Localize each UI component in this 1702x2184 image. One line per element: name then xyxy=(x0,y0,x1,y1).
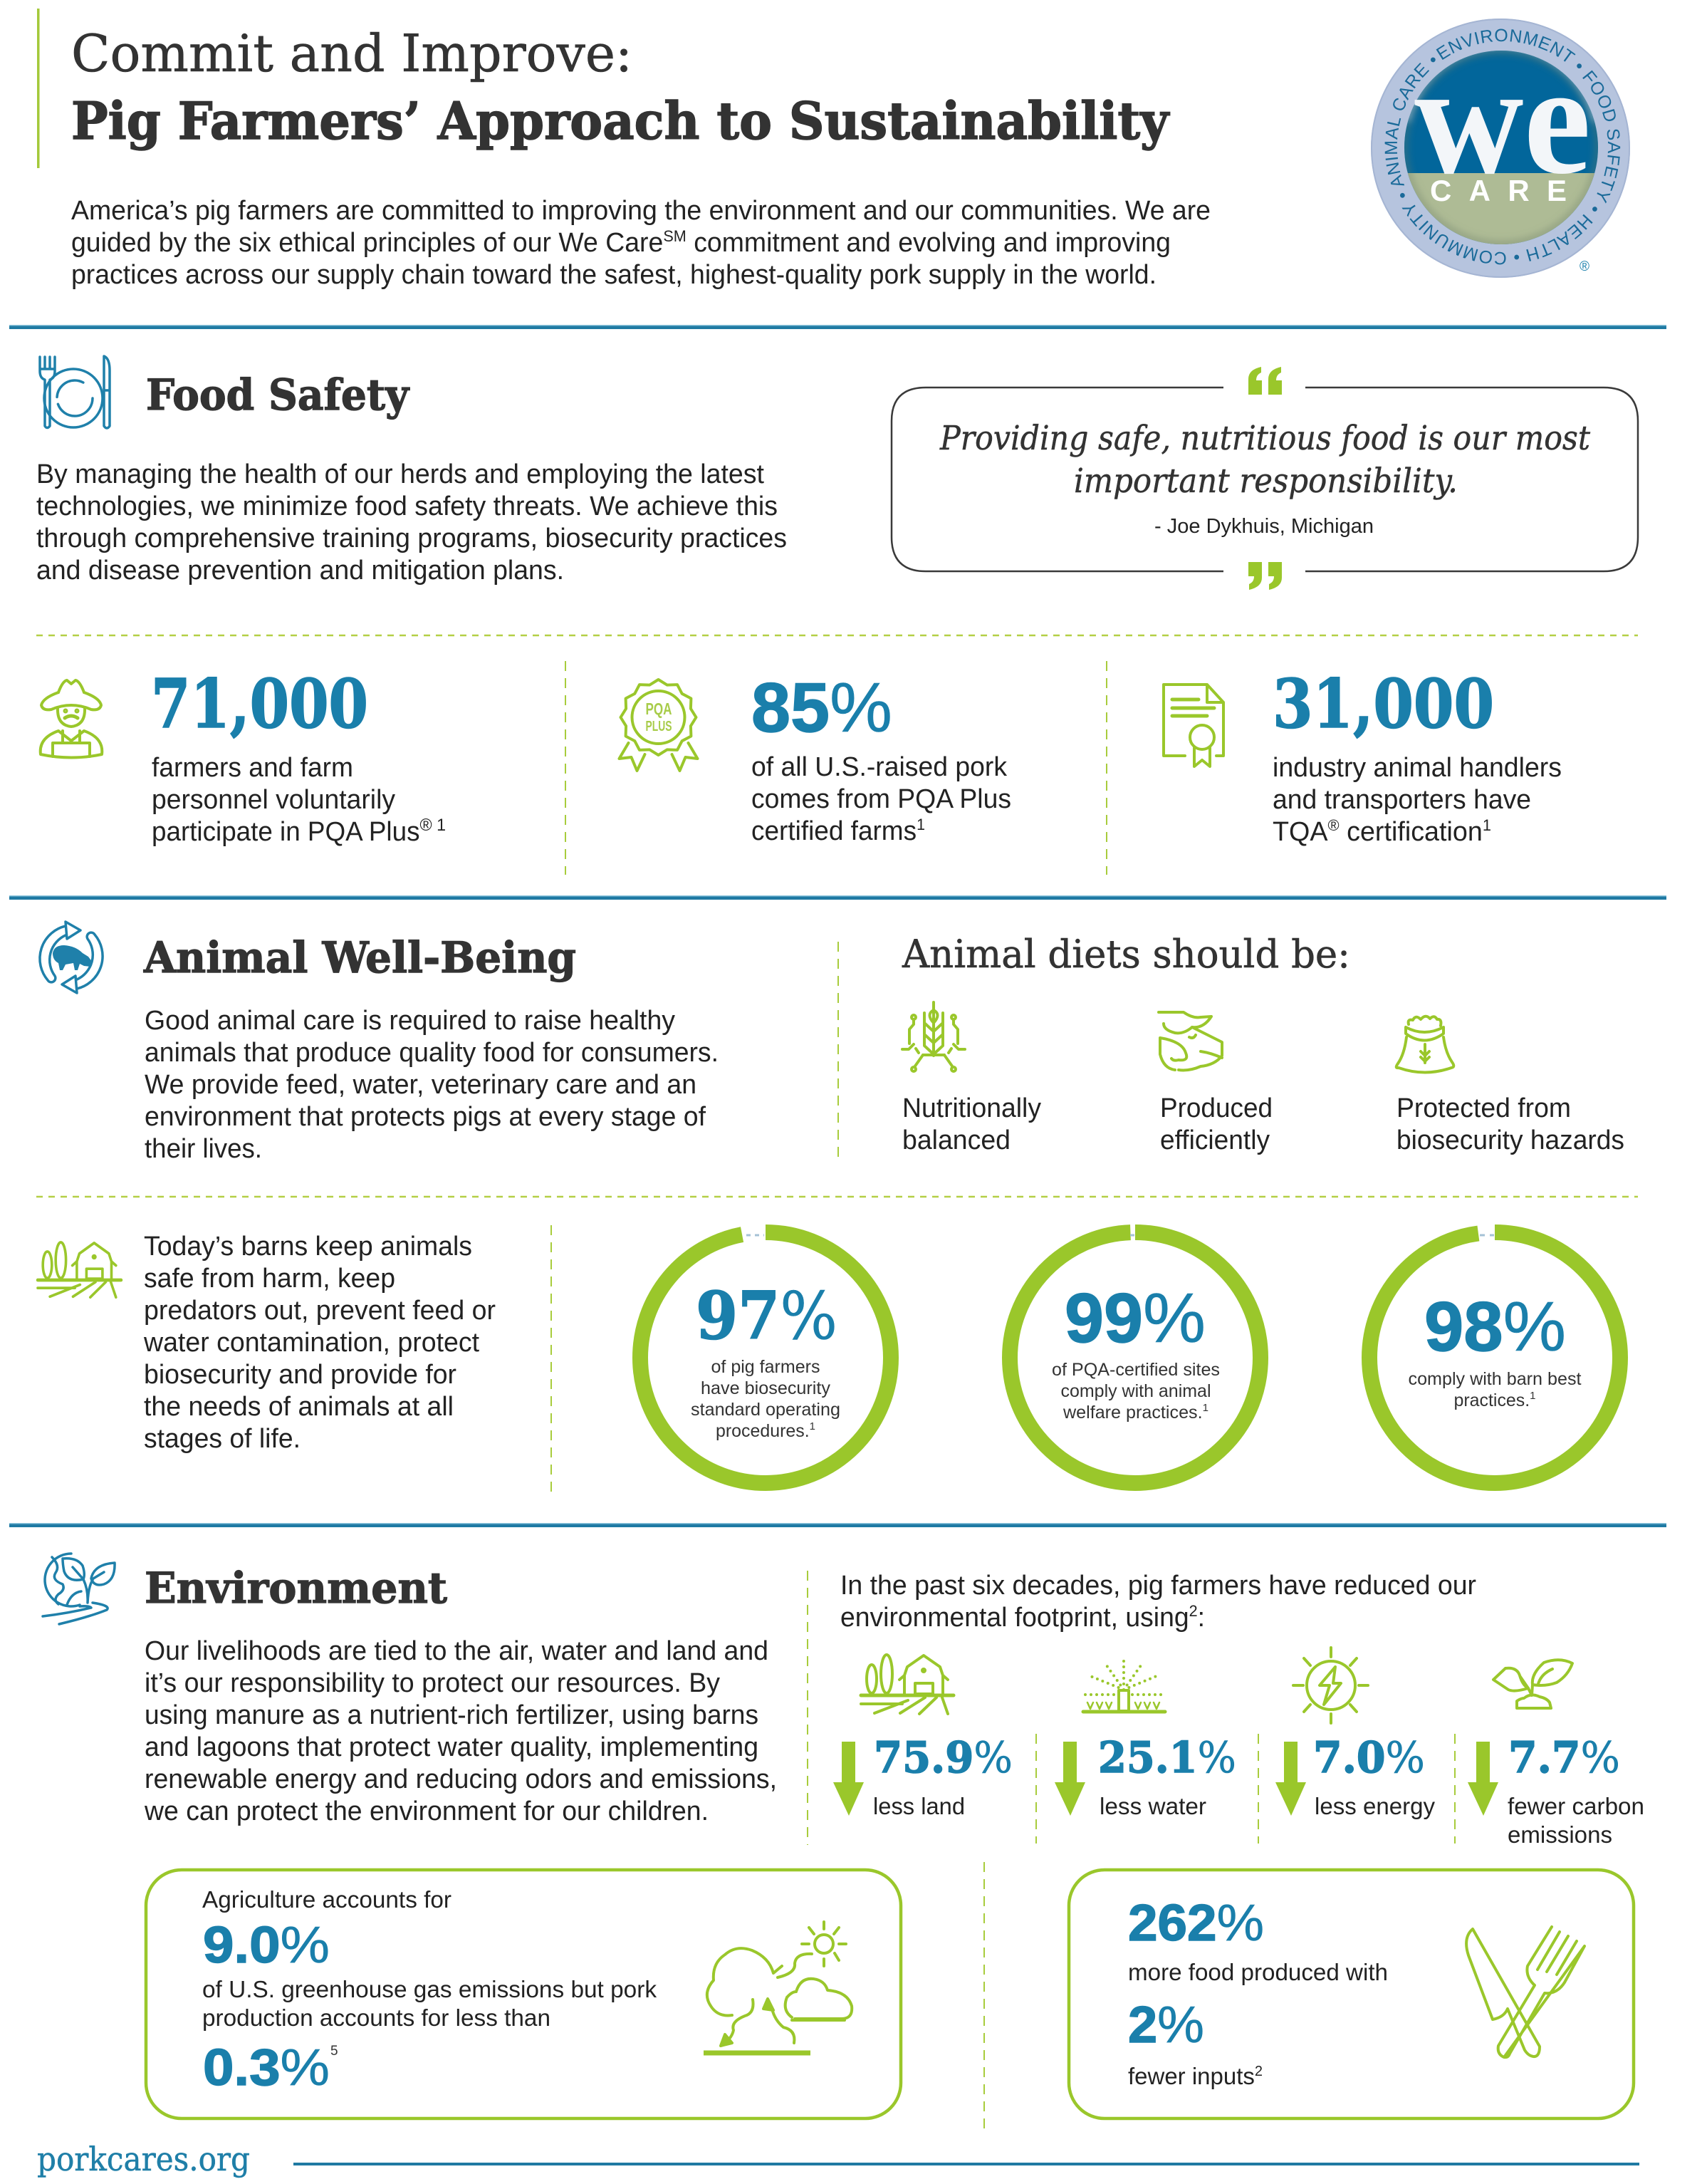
body text xyxy=(144,1636,777,1826)
icon: opening quote mark xyxy=(1248,367,1282,395)
stat: 31,000 handlers: industry animal handlers xyxy=(1273,753,1562,783)
chart: 97% donut: 1 xyxy=(810,1420,815,1432)
diet item: nutritionally balanced: balanced xyxy=(902,1125,1011,1155)
chart: 98% donut: practices. xyxy=(1454,1390,1530,1410)
body text: By managing the health of our herds and employing the latest xyxy=(36,459,764,489)
panel: food safety xyxy=(36,356,1638,875)
chart: 97% donut: have biosecurity xyxy=(701,1378,830,1398)
callout: quote xyxy=(892,367,1638,590)
heading: Animal Well-Being xyxy=(143,933,576,983)
stat: less energy xyxy=(1275,1648,1435,1819)
stat: 71,000 farmers: ® xyxy=(419,816,432,835)
logo: We Care seal: ENVIRONMENT • FOOD SAFETY • HEALTH • COMMUNITY • ANIMAL CARE • xyxy=(1384,28,1621,265)
stat: less water: 25.1% xyxy=(1098,1733,1236,1783)
stat: 71,000 farmers: 71,000 xyxy=(151,665,368,744)
body text: Our livelihoods are tied to the air, water and land and xyxy=(145,1636,768,1666)
chart: 99% donut: of PQA-certified sites xyxy=(1052,1360,1220,1380)
stat: 71,000 farmers xyxy=(41,665,446,847)
callout: quote: important responsibility. xyxy=(1074,462,1458,501)
body text: it’s our responsibility to protect our resources. By xyxy=(145,1668,720,1698)
stat: 85% of pork: of all U.S.-raised pork xyxy=(751,752,1008,782)
diet item: produced efficiently xyxy=(1159,1012,1273,1155)
chart: 99% donut: 1 xyxy=(1203,1402,1208,1414)
stat: fewer carbon emissions: fewer carbon xyxy=(1508,1793,1644,1819)
stat: 31,000 handlers: TQA xyxy=(1273,817,1328,847)
icon: barn on land xyxy=(861,1655,954,1714)
stat: fewer carbon emissions: emissions xyxy=(1508,1821,1612,1848)
intro text: America’s pig farmers are committed to improving the environment and our communities. We are xyxy=(71,196,1211,226)
stat: less land: 75.9% xyxy=(874,1733,1013,1783)
body text: renewable energy and reducing odors and emissions, xyxy=(145,1764,777,1794)
body text: technologies, we minimize food safety threats. We achieve this xyxy=(36,492,778,521)
footprint intro text: environmental footprint, using xyxy=(840,1603,1196,1633)
callout: quote: Providing safe, nutritious food is our most xyxy=(939,419,1590,458)
intro text: commitment and evolving and improving xyxy=(686,228,1171,258)
title: Pig Farmers’ Approach to Sustainability xyxy=(71,90,1170,151)
stat: 31,000 handlers: 31,000 xyxy=(1273,665,1494,744)
barns text: predators out, prevent feed or xyxy=(144,1296,496,1326)
chart: 98% donut: 98% xyxy=(1424,1287,1566,1366)
callout: greenhouse gas emissions: Agriculture accounts for xyxy=(202,1886,451,1913)
stat: 31,000 handlers: certification xyxy=(1340,817,1483,847)
arrow: down xyxy=(833,1742,864,1816)
callout: more food with fewer inputs: 2 xyxy=(1255,2064,1263,2079)
body text: through comprehensive training programs, biosecurity practices xyxy=(36,524,787,553)
callout: greenhouse gas emissions: 5 xyxy=(330,2044,338,2059)
icon: farmer xyxy=(41,680,102,758)
icon: clouds, sun and emissions xyxy=(704,1922,852,2053)
stat: less energy: less energy xyxy=(1315,1793,1435,1819)
body text: their lives. xyxy=(145,1134,262,1164)
intro text: practices across our supply chain toward the safest, highest-quality pork supply in the world. xyxy=(71,260,1157,290)
accent rule xyxy=(37,9,40,168)
chart: 99% donut: 99% xyxy=(1065,1279,1206,1357)
stat: 85% of pork: 85% xyxy=(751,668,892,747)
footprint intro text: 2 xyxy=(1189,1602,1198,1620)
footprint intro text: : xyxy=(1198,1603,1205,1633)
callout: more food with fewer inputs: 2% xyxy=(1128,1997,1204,2054)
barns text: the needs of animals at all xyxy=(144,1392,454,1422)
icon: PQA Plus badge: PLUS xyxy=(645,719,672,734)
chart: 99% donut xyxy=(1010,1232,1260,1483)
icon: certificate xyxy=(1164,685,1223,766)
logo: We Care seal: ® xyxy=(1580,259,1589,274)
arrow: down xyxy=(1275,1742,1306,1816)
panel: header xyxy=(37,9,1630,290)
footer xyxy=(37,2140,1639,2178)
diet item: nutritionally balanced xyxy=(902,1002,1041,1155)
stat: 71,000 farmers: 1 xyxy=(432,816,446,835)
stat: 31,000 handlers: and transporters have xyxy=(1273,785,1531,815)
body text: We provide feed, water, veterinary care and an xyxy=(145,1070,696,1100)
stat: 71,000 farmers: participate in PQA Plus xyxy=(152,817,429,847)
heading: Food Safety xyxy=(146,370,410,420)
stat: 71,000 farmers: personnel voluntarily xyxy=(152,785,395,815)
body text xyxy=(145,1006,719,1164)
icon: pig head and leaf xyxy=(1159,1012,1222,1070)
barns text: safe from harm, keep xyxy=(144,1264,395,1294)
callout: greenhouse gas emissions: 9.0% xyxy=(203,1917,330,1974)
panel: environment xyxy=(43,1554,1644,2131)
stat: 31,000 handlers: ® xyxy=(1328,816,1340,834)
body text: Good animal care is required to raise healthy xyxy=(145,1006,675,1036)
chart: 99% donut: welfare practices. xyxy=(1063,1403,1202,1423)
chart: 98% donut: 1 xyxy=(1530,1390,1535,1402)
logo: We Care seal: CARE xyxy=(1430,174,1567,207)
callout: quote: - Joe Dykhuis, Michigan xyxy=(1154,515,1374,538)
callout: greenhouse gas emissions: 0.3% xyxy=(203,2039,330,2096)
diet item: protected from hazards xyxy=(1396,1016,1624,1155)
callout: greenhouse gas emissions xyxy=(146,1870,901,2118)
callout: more food with fewer inputs: 262% xyxy=(1128,1895,1264,1952)
callout: greenhouse gas emissions: production accounts for less than xyxy=(202,2004,550,2031)
heading: animal diets: Animal diets should be: xyxy=(902,932,1350,977)
stat: fewer carbon emissions xyxy=(1468,1660,1644,1848)
stat: less water: less water xyxy=(1100,1793,1206,1819)
icon: PQA Plus badge xyxy=(620,680,698,771)
callout: greenhouse gas emissions: of U.S. greenhouse gas emissions but pork xyxy=(202,1976,657,2002)
section rule xyxy=(9,1523,1666,1527)
section rule xyxy=(9,895,1666,900)
stat: less energy: 7.0% xyxy=(1313,1733,1425,1783)
chart: 98% donut xyxy=(1369,1232,1620,1483)
icon: pig with cycle arrows xyxy=(40,922,103,993)
body text xyxy=(36,459,787,586)
barns text: biosecurity and provide for xyxy=(144,1360,456,1390)
footprint intro text xyxy=(840,1571,1476,1633)
title xyxy=(71,24,1170,151)
stat: less land xyxy=(833,1655,1013,1819)
section rule xyxy=(9,325,1666,329)
chart: 98% donut: comply with barn best xyxy=(1409,1369,1582,1389)
diet item: produced efficiently: efficiently xyxy=(1160,1125,1270,1155)
chart: 97% donut xyxy=(640,1232,891,1483)
footer: porkcares.org xyxy=(37,2140,250,2178)
diet item: protected from hazards: Protected from xyxy=(1396,1093,1571,1123)
chart: 97% donut: of pig farmers xyxy=(711,1357,820,1377)
stat: 31,000 handlers: 1 xyxy=(1483,816,1491,834)
barns text: stages of life. xyxy=(144,1424,301,1454)
intro text xyxy=(71,196,1211,290)
chart: 97% donut: procedures. xyxy=(716,1421,810,1441)
icon: barn and trees xyxy=(38,1242,121,1297)
stat: 85% of pork: comes from PQA Plus xyxy=(751,784,1011,814)
icon: feed bag xyxy=(1396,1016,1453,1073)
barns text: water contamination, protect xyxy=(143,1328,479,1358)
diet item: produced efficiently: Produced xyxy=(1160,1093,1273,1123)
chart: 99% donut: comply with animal xyxy=(1061,1381,1211,1401)
chart: 97% donut: standard operating xyxy=(691,1400,840,1420)
stat: less water xyxy=(1055,1658,1236,1819)
icon: globe with sprout xyxy=(43,1554,115,1624)
icon: solar energy xyxy=(1293,1648,1368,1723)
stat: 85% of pork xyxy=(620,668,1011,846)
barns text: Today’s barns keep animals xyxy=(144,1232,472,1262)
footprint intro text: In the past six decades, pig farmers have reduced our xyxy=(840,1571,1476,1601)
intro text: SM xyxy=(663,227,686,245)
body text: we can protect the environment for our children. xyxy=(144,1796,709,1826)
icon: wheat circuit xyxy=(902,1002,965,1071)
icon: sprout xyxy=(1493,1660,1572,1708)
diet item: nutritionally balanced: Nutritionally xyxy=(902,1093,1041,1123)
icon: plate and cutlery xyxy=(40,356,110,428)
body text: and disease prevention and mitigation plans. xyxy=(36,556,564,586)
callout: more food with fewer inputs xyxy=(1069,1870,1634,2118)
arrow: down xyxy=(1055,1742,1085,1816)
title: Commit and Improve: xyxy=(71,24,632,83)
stat: 85% of pork: 1 xyxy=(917,816,925,833)
chart: 97% donut: 97% xyxy=(696,1277,837,1354)
intro text: guided by the six ethical principles of our We Care xyxy=(71,228,672,258)
stat: 31,000 handlers xyxy=(1164,665,1562,847)
heading: Environment xyxy=(145,1564,447,1613)
body text: and lagoons that protect water quality, implementing xyxy=(145,1732,758,1762)
panel: animal well-being xyxy=(36,922,1638,1494)
barns text xyxy=(143,1232,496,1454)
arrow: down xyxy=(1468,1742,1498,1816)
diet item: protected from hazards: biosecurity hazards xyxy=(1396,1125,1624,1155)
callout: more food with fewer inputs: fewer inputs xyxy=(1128,2063,1255,2089)
stat: 85% of pork: certified farms xyxy=(751,816,922,846)
logo: We Care seal: we xyxy=(1414,32,1591,207)
body text: using manure as a nutrient-rich fertilizer, using barns xyxy=(145,1700,758,1730)
icon: closing quote mark xyxy=(1248,562,1282,590)
icon: sprinkler xyxy=(1083,1658,1165,1712)
stat: 71,000 farmers: farmers and farm xyxy=(152,753,353,783)
body text: environment that protects pigs at every stage of xyxy=(145,1102,706,1132)
icon: knife and fork xyxy=(1466,1927,1584,2057)
icon: PQA Plus badge: PQA xyxy=(645,700,672,718)
body text: animals that produce quality food for consumers. xyxy=(145,1038,719,1068)
stat: less land: less land xyxy=(873,1793,965,1819)
stat: fewer carbon emissions: 7.7% xyxy=(1508,1733,1620,1783)
callout: more food with fewer inputs: more food produced with xyxy=(1128,1959,1388,1985)
